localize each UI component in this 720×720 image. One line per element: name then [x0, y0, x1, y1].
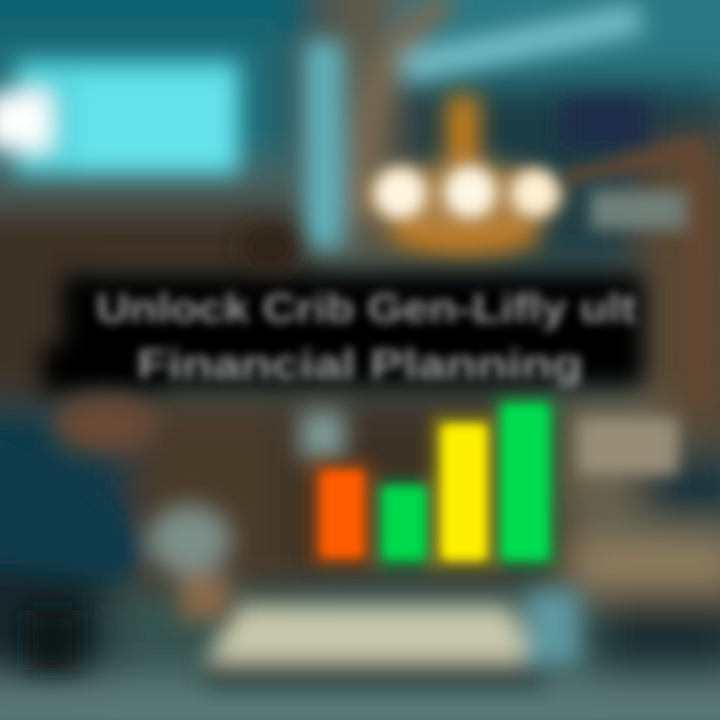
bar: orange: [320, 470, 364, 558]
title text: Financial Planning: [137, 341, 583, 387]
bar: yellow: [441, 424, 487, 560]
title text: [96, 285, 636, 387]
book on table: [205, 590, 580, 682]
bar: green tall: [501, 404, 549, 560]
blurred people foreground: [0, 224, 345, 670]
title banner: [42, 274, 644, 393]
chandelier: [365, 95, 565, 258]
ceiling beam and arch: [304, 0, 650, 250]
bar chart: [310, 396, 556, 570]
bar: green short: [382, 486, 426, 560]
title text: Unlock Crib Gen-Lifly ult: [96, 285, 636, 331]
bookshelf right: [565, 148, 700, 474]
window: bright cyan screen: [0, 60, 240, 175]
